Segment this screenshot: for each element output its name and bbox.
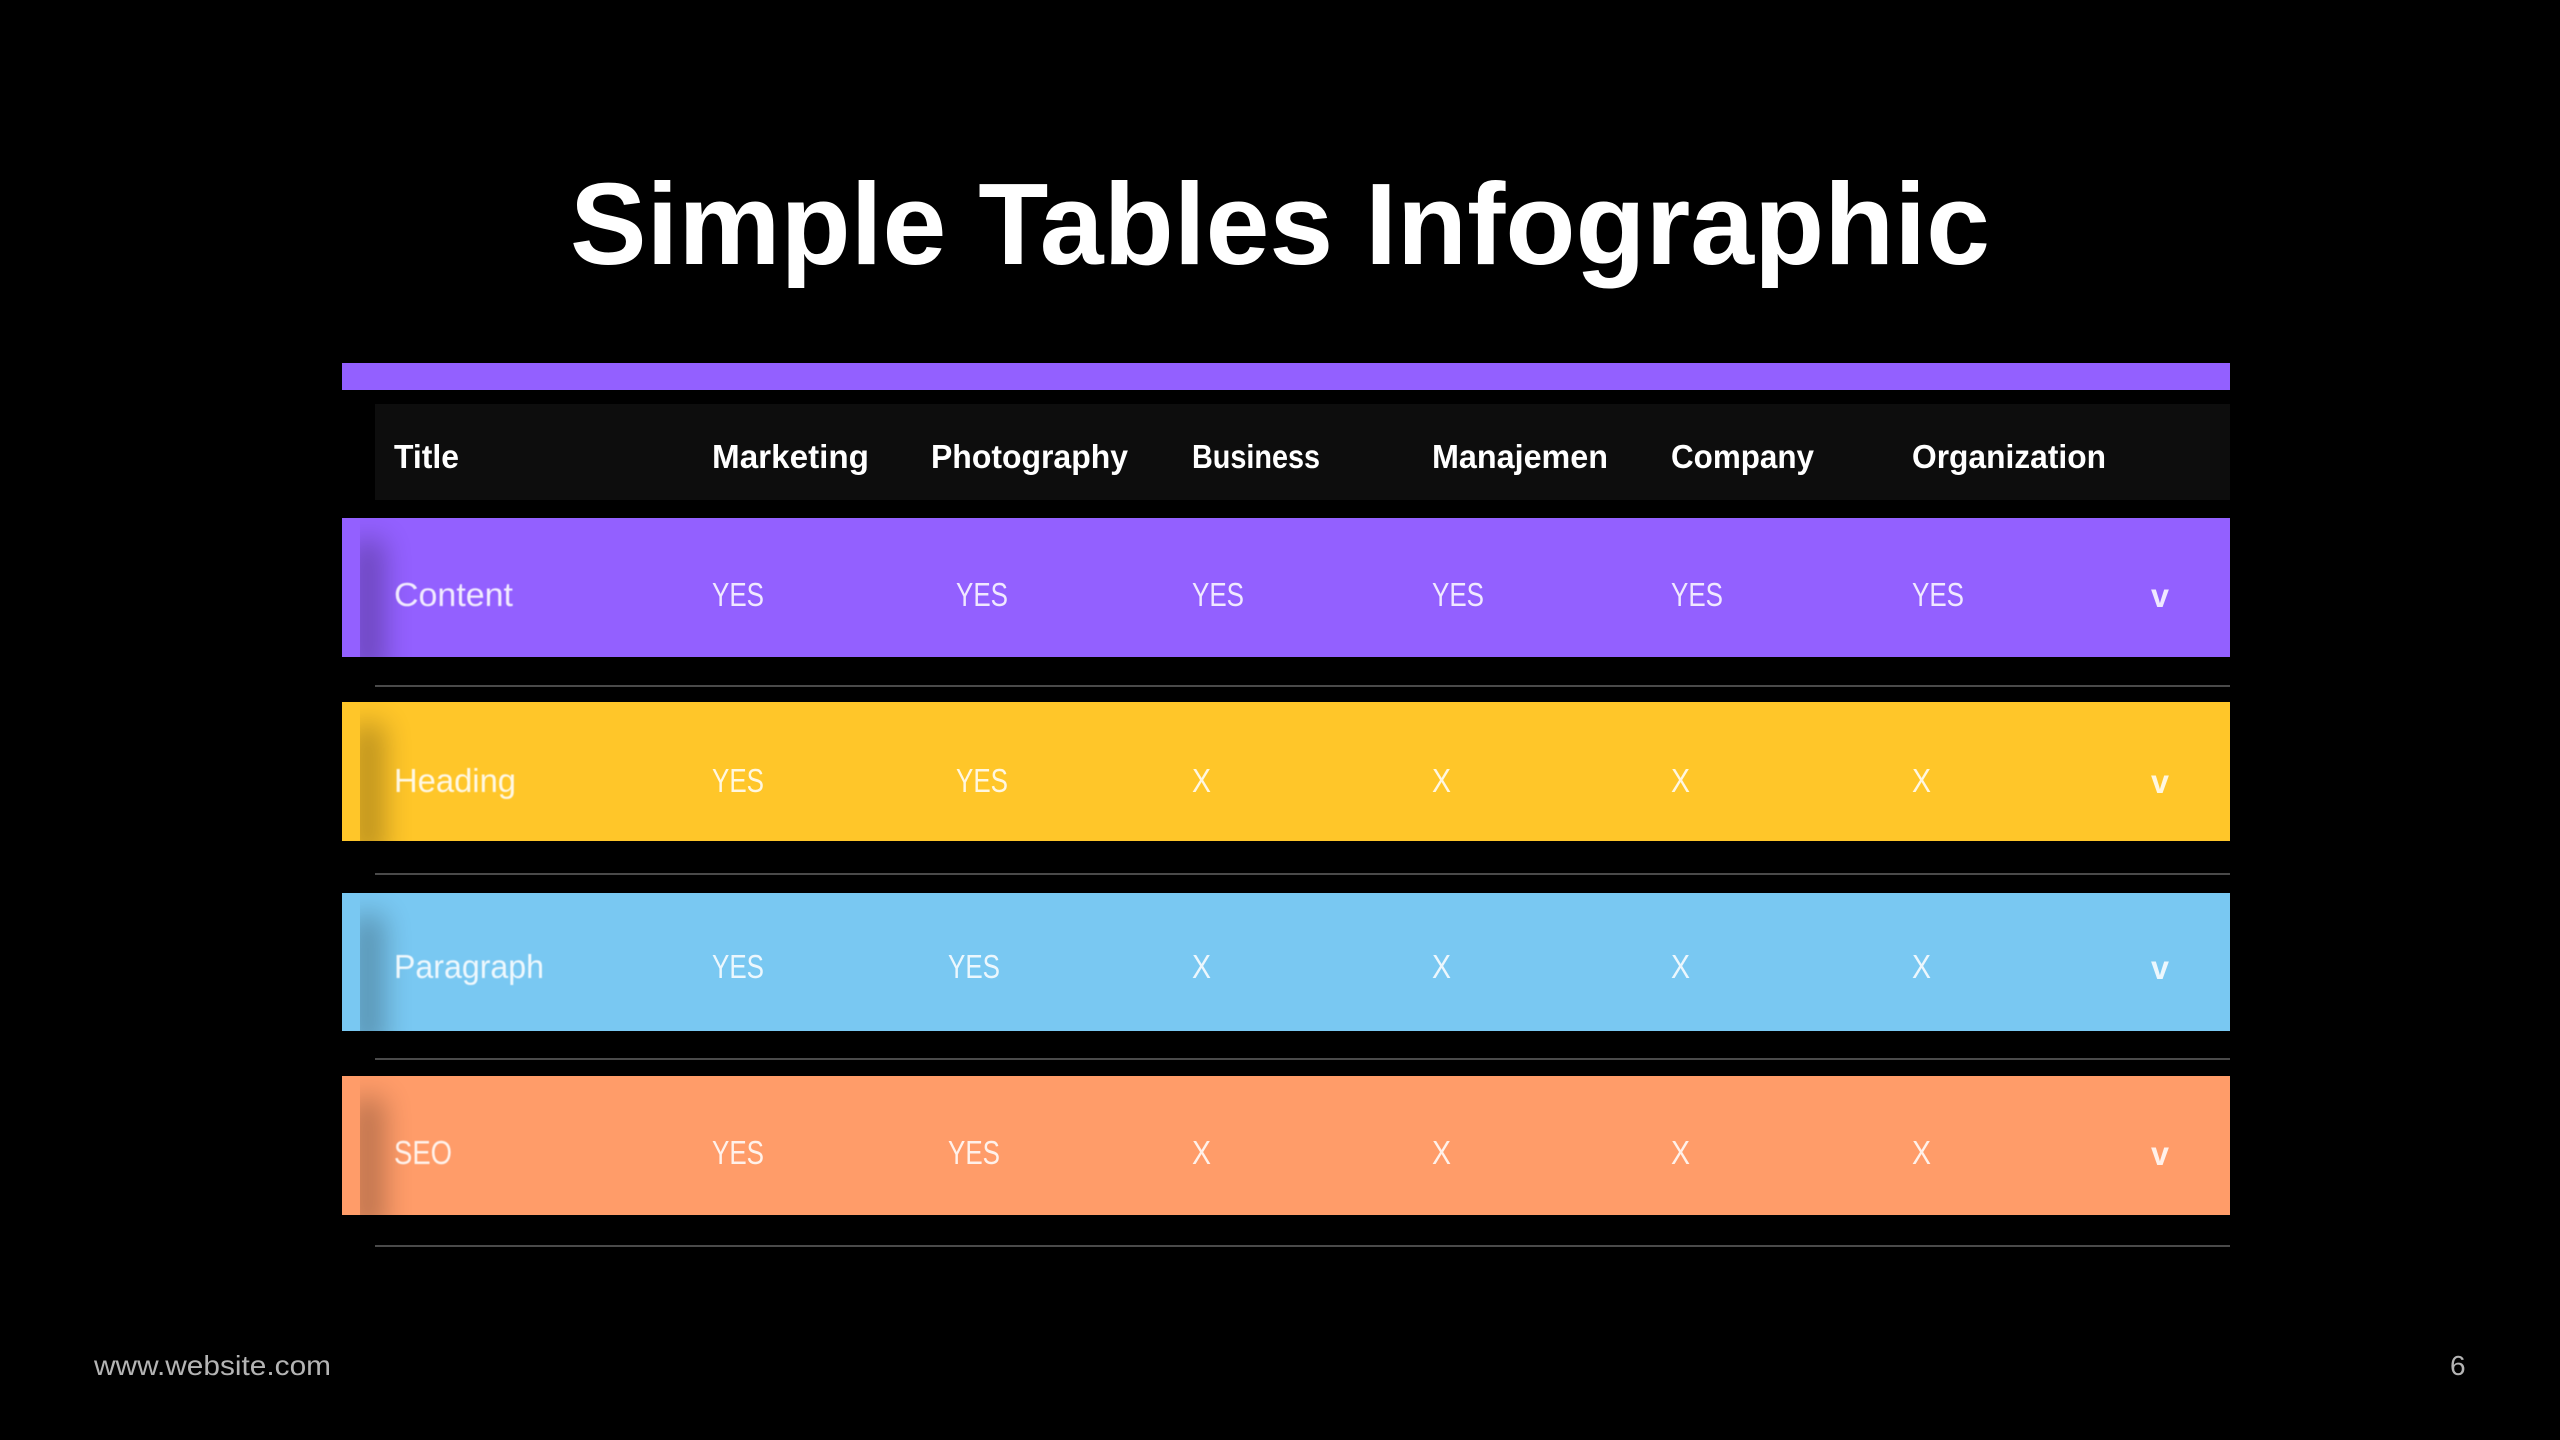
row: SEO: X	[1671, 1134, 1690, 1171]
row: SEO: YES	[948, 1134, 1000, 1171]
row: Paragraph: YES	[712, 948, 764, 985]
row: Content: YES	[712, 576, 764, 613]
header: Business: Business	[1192, 438, 1320, 475]
row: Paragraph: X	[1192, 948, 1211, 985]
row: SEO: X	[1432, 1134, 1451, 1171]
row: SEO: X	[1912, 1134, 1931, 1171]
row: Heading: Heading	[394, 762, 516, 799]
row: Paragraph: v	[2151, 949, 2170, 986]
row: SEO	[342, 1076, 2230, 1215]
table header row	[375, 404, 2230, 500]
row: Heading: X	[1192, 762, 1211, 799]
row: Content: YES	[1192, 576, 1244, 613]
divider under Paragraph	[375, 1058, 2230, 1060]
row: SEO: X	[1192, 1134, 1211, 1171]
row: Content: YES	[1912, 576, 1964, 613]
row: SEO: v	[2151, 1135, 2170, 1172]
row: Heading	[342, 702, 2230, 841]
divider under Heading	[375, 873, 2230, 875]
row: Paragraph: X	[1912, 948, 1931, 985]
header: Company: Company	[1671, 438, 1815, 475]
row: Content: v	[2151, 577, 2170, 614]
row: Paragraph: Paragraph	[394, 948, 544, 985]
row: Content	[342, 518, 2230, 657]
row: Content: YES	[1671, 576, 1723, 613]
row: Paragraph	[342, 893, 2230, 1031]
footer website: www.website.com	[93, 1350, 331, 1381]
row: Paragraph: X	[1432, 948, 1451, 985]
row: SEO: YES	[712, 1134, 764, 1171]
row: Paragraph: X	[1671, 948, 1690, 985]
row: Content: YES	[1432, 576, 1484, 613]
page number: 6	[2450, 1350, 2466, 1381]
divider under Content	[375, 685, 2230, 687]
title: Simple Tables Infographic	[570, 159, 1990, 289]
header: Manajemen: Manajemen	[1432, 438, 1608, 475]
row: Heading: YES	[956, 762, 1008, 799]
table top accent bar	[342, 363, 2230, 390]
header: Organization: Organization	[1912, 438, 2106, 475]
row: Heading: X	[1432, 762, 1451, 799]
row: Heading: X	[1912, 762, 1931, 799]
row: Content: YES	[956, 576, 1008, 613]
row: Content: Content	[394, 576, 513, 613]
row: Heading: X	[1671, 762, 1690, 799]
row: Heading: YES	[712, 762, 764, 799]
header: Photography: Photography	[931, 438, 1129, 475]
row: SEO: SEO	[394, 1134, 452, 1171]
header: Marketing: Marketing	[712, 438, 869, 475]
divider under SEO	[375, 1245, 2230, 1247]
row: Paragraph: YES	[948, 948, 1000, 985]
row: Heading: v	[2151, 763, 2170, 800]
header: Title: Title	[394, 438, 459, 475]
